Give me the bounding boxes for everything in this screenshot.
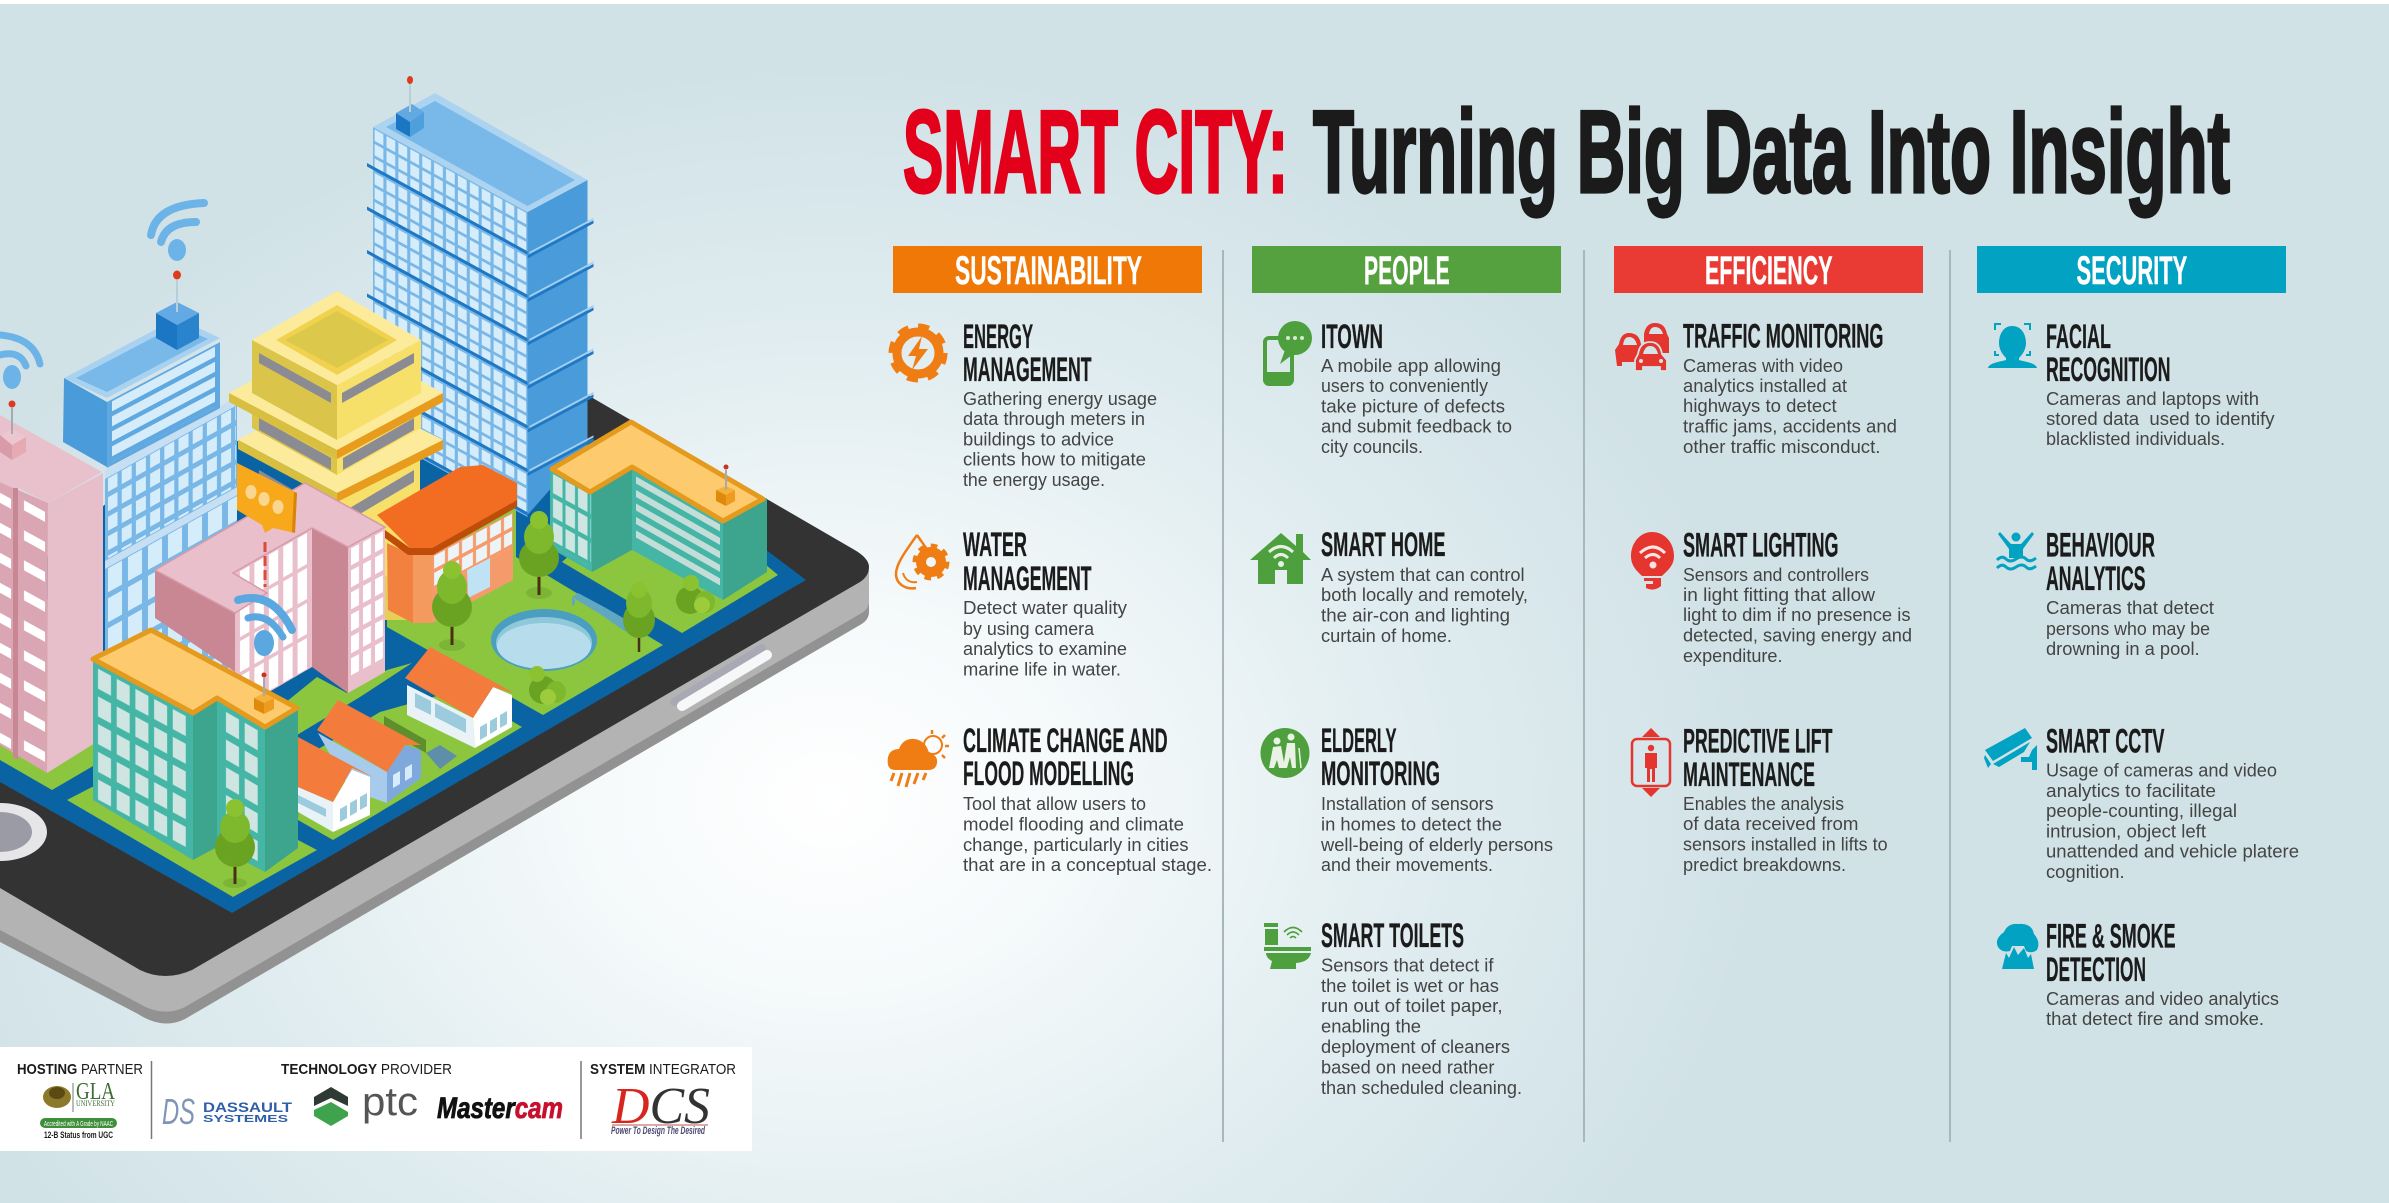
logo: DCS: Power To Design The Desired <box>611 1125 705 1137</box>
logo: ptc <box>314 1080 418 1126</box>
title <box>903 86 2230 217</box>
logo: ptc: ptc <box>362 1080 418 1124</box>
body text: Detect water quality <box>963 597 1128 618</box>
body text: in light fitting that allow <box>1683 584 1876 605</box>
phone body <box>0 292 869 1023</box>
item: traffic monitoring <box>1615 318 1897 457</box>
header: security: SECURITY <box>2076 249 2187 293</box>
column dividers <box>1223 250 1950 1142</box>
heading: SMART LIGHTING <box>1683 526 1839 564</box>
body text <box>963 793 1212 875</box>
heading: SMART HOME <box>1321 526 1446 564</box>
logo: GLA University: Accredited with A Grade by NAAC <box>44 1119 113 1128</box>
body text: Cameras and video analytics <box>2046 988 2279 1009</box>
body text: take picture of defects <box>1321 396 1505 416</box>
heading <box>963 318 1092 389</box>
body text <box>1320 793 1553 875</box>
header: sustainability: SUSTAINABILITY <box>955 249 1142 293</box>
heading: SMART CCTV <box>2046 722 2165 760</box>
item: smart home <box>1250 526 1528 646</box>
icon: swimmer in waves <box>1997 532 2036 569</box>
icon: face scan <box>1988 324 2037 368</box>
heading: FIRE & SMOKE <box>2046 918 2176 956</box>
body text: detected, saving energy and <box>1683 624 1912 646</box>
body text: expenditure. <box>1683 645 1782 666</box>
heading: ANALYTICS <box>2046 560 2146 598</box>
heading <box>2046 526 2155 598</box>
logo: GLA University: UNIVERSITY <box>76 1099 115 1108</box>
heading: TRAFFIC MONITORING <box>1683 318 1884 356</box>
body text: model flooding and climate <box>963 814 1184 834</box>
pond <box>491 609 597 671</box>
body text: unattended and vehicle platere <box>2046 840 2299 862</box>
logo: Dassault Systemes: DASSAULT <box>203 1099 293 1115</box>
tall blue tower <box>367 76 594 517</box>
orange building <box>377 465 517 623</box>
phone home button <box>0 803 47 861</box>
body text: in homes to detect the <box>1321 814 1502 834</box>
heading <box>1321 722 1440 793</box>
heading: FLOOD MODELLING <box>963 755 1134 793</box>
header: efficiency: EFFICIENCY <box>1705 249 1833 293</box>
heading: ITOWN <box>1321 318 1383 356</box>
body text: intrusion, object left <box>2046 820 2206 842</box>
heading: DETECTION <box>2046 951 2146 989</box>
heading <box>963 722 1168 793</box>
icon: house with wifi <box>1250 533 1311 584</box>
heading <box>2046 918 2176 989</box>
icon: chat bubble <box>237 463 297 587</box>
icon: wifi bulb <box>1631 532 1674 590</box>
heading: MANAGEMENT <box>963 560 1092 598</box>
logo: GLA University <box>40 1079 117 1141</box>
body text: deployment of cleaners <box>1321 1036 1510 1057</box>
body text: Enables the analysis <box>1683 793 1844 814</box>
icon: toilet with wifi <box>1264 923 1311 969</box>
icon: three cars <box>1615 323 1669 371</box>
right teal building <box>550 422 767 600</box>
heading <box>1683 722 1833 794</box>
body text: analytics installed at <box>1683 375 1847 396</box>
houses <box>298 647 514 832</box>
heading: FACIAL <box>2046 318 2111 356</box>
body text: well-being of elderly persons <box>1320 834 1553 855</box>
body text: sensors installed in lifts to <box>1683 834 1888 854</box>
icon: phone with chat <box>1265 321 1312 384</box>
body text: of data received from <box>1683 813 1858 834</box>
panel: sustainability <box>888 246 1212 875</box>
partner logo strip <box>0 1047 752 1151</box>
logo: DCS: DCS <box>611 1078 710 1135</box>
yellow building <box>229 291 443 620</box>
icon: wifi on pink building <box>238 598 292 656</box>
body text: Usage of cameras and video <box>2046 760 2277 780</box>
body text: based on need rather <box>1321 1056 1494 1078</box>
heading: ENERGY <box>963 318 1033 356</box>
icon: water gear <box>896 535 947 588</box>
heading: PREDICTIVE LIFT <box>1683 722 1833 760</box>
screen road layer <box>0 440 806 913</box>
item: climate change <box>888 722 1212 875</box>
body text: Installation of sensors <box>1321 793 1494 814</box>
body text: the energy usage. <box>963 469 1105 490</box>
item: energy management <box>892 318 1157 490</box>
body text <box>1683 564 1912 666</box>
heading: BEHAVIOUR <box>2046 526 2155 564</box>
body text: drowning in a pool. <box>2046 638 2200 659</box>
body text: Cameras that detect <box>2046 597 2214 618</box>
body text: marine life in water. <box>963 658 1121 680</box>
body text: persons who may be <box>2046 618 2210 639</box>
body text: Gathering energy usage <box>963 388 1157 409</box>
body text: change, particularly in cities <box>963 834 1188 855</box>
icon: fire and smoke <box>1997 924 2038 969</box>
heading <box>2046 318 2170 389</box>
item: elderly monitoring <box>1260 722 1553 875</box>
body text <box>2046 388 2275 449</box>
heading: SMART TOILETS <box>1321 917 1464 955</box>
panel: security <box>1977 246 2299 1029</box>
body text <box>963 388 1157 490</box>
panel: efficiency <box>1614 246 1923 875</box>
body text: Sensors and controllers <box>1683 564 1869 585</box>
front teal building <box>93 630 298 872</box>
body text: that are in a conceptual stage. <box>963 854 1212 875</box>
body text: enabling the <box>1321 1016 1421 1036</box>
body text: curtain of home. <box>1321 625 1452 646</box>
left pink building <box>0 400 103 774</box>
illustration: isometric smart city on a smartphone <box>0 76 869 1023</box>
body text <box>1683 355 1897 457</box>
item: facial recognition <box>1988 318 2275 449</box>
body text: run out of toilet paper, <box>1321 995 1503 1016</box>
middle pink building <box>155 483 385 712</box>
panel: people <box>1250 246 1561 1098</box>
item: behaviour analytics <box>1997 526 2214 659</box>
body text <box>963 597 1128 680</box>
body text: Cameras with video <box>1683 355 1843 376</box>
body text <box>1683 793 1888 875</box>
body text: Tool that allow users to <box>963 793 1146 814</box>
item: fire and smoke detection <box>1997 918 2279 1029</box>
logo: Dassault Systemes: SYSTEMES <box>203 1114 288 1125</box>
title: SMART CITY: <box>903 86 1288 217</box>
body text: and submit feedback to <box>1321 416 1512 436</box>
body text: cognition. <box>2046 861 2125 882</box>
body text <box>1321 954 1522 1098</box>
logo: GLA University: GLA <box>76 1079 116 1105</box>
label: hosting partner: HOSTING PARTNER <box>17 1061 143 1078</box>
body text: analytics to examine <box>963 638 1127 659</box>
icon: energy gear <box>892 326 944 380</box>
heading: CLIMATE CHANGE AND <box>963 722 1168 760</box>
body text: traffic jams, accidents and <box>1683 416 1897 436</box>
heading: WATER <box>963 526 1027 564</box>
heading: ELDERLY <box>1321 722 1397 760</box>
phone side button <box>674 648 767 706</box>
body text: A system that can control <box>1321 564 1525 585</box>
label: system integrator: SYSTEM INTEGRATOR <box>590 1061 736 1078</box>
benches <box>572 593 630 632</box>
icon: cloud, sun and rain <box>888 730 949 787</box>
body text <box>1321 355 1512 457</box>
icon: elderly couple <box>1260 728 1310 778</box>
heading: MONITORING <box>1321 755 1440 793</box>
body text: than scheduled cleaning. <box>1321 1077 1522 1098</box>
body text: users to conveniently <box>1321 375 1489 396</box>
item: smart cctv <box>1984 722 2299 882</box>
header: people <box>1252 246 1561 293</box>
logo: Mastercam: Mastercam <box>437 1092 563 1125</box>
heading: MAINTENANCE <box>1683 756 1815 794</box>
body text: that detect fire and smoke. <box>2046 1008 2264 1029</box>
logo: GLA University: 12-B Status from UGC <box>44 1130 113 1141</box>
logo: Dassault Systemes <box>162 1091 293 1132</box>
item: water management <box>896 526 1128 680</box>
body text: A mobile app allowing <box>1321 355 1501 376</box>
item: smart lighting <box>1631 526 1912 666</box>
icon: lift with arrows <box>1632 728 1670 797</box>
body text: buildings to advice <box>963 428 1114 450</box>
body text: data through meters in <box>963 408 1145 429</box>
body text: the air-con and lighting <box>1321 604 1510 626</box>
header: efficiency <box>1614 246 1923 293</box>
body text <box>1321 564 1528 646</box>
heading: RECOGNITION <box>2046 351 2170 389</box>
item: smart toilets <box>1264 917 1522 1098</box>
body text: light to dim if no presence is <box>1683 604 1910 625</box>
header: sustainability <box>893 246 1202 293</box>
left blue building with wifi <box>63 270 237 771</box>
body text: highways to detect <box>1683 395 1837 416</box>
body text: city councils. <box>1321 436 1423 457</box>
body text: predict breakdowns. <box>1683 854 1846 875</box>
body text: Cameras and laptops with <box>2046 388 2259 409</box>
body text: people-counting, illegal <box>2046 800 2237 821</box>
body text <box>2046 597 2214 659</box>
body text: both locally and remotely, <box>1321 584 1528 605</box>
icon: wifi above pink building <box>0 335 40 389</box>
header: security <box>1977 246 2286 293</box>
green city blocks <box>0 490 778 897</box>
item: predictive lift maintenance <box>1632 722 1888 875</box>
heading: MANAGEMENT <box>963 351 1092 389</box>
body text: blacklisted individuals. <box>2046 428 2225 449</box>
label: technology provider: TECHNOLOGY PROVIDER <box>281 1061 452 1078</box>
icon: wifi above blue building <box>151 203 204 261</box>
body text: stored data used to identify <box>2046 408 2275 429</box>
icon: cctv camera <box>1984 728 2037 770</box>
body text <box>2046 988 2279 1029</box>
body text: Sensors that detect if <box>1321 954 1494 976</box>
body text: the toilet is wet or has <box>1321 975 1499 996</box>
trees <box>215 511 715 888</box>
header: people: PEOPLE <box>1364 249 1450 293</box>
heading <box>963 526 1092 598</box>
logo: Dassault Systemes: DS <box>162 1091 195 1132</box>
body text <box>2046 760 2299 882</box>
body text: analytics to facilitate <box>2046 780 2216 801</box>
item: itown <box>1265 318 1512 457</box>
body text: by using camera <box>963 618 1095 639</box>
body text: other traffic misconduct. <box>1683 436 1880 457</box>
body text: and their movements. <box>1321 854 1493 875</box>
body text: clients how to mitigate <box>963 448 1146 470</box>
